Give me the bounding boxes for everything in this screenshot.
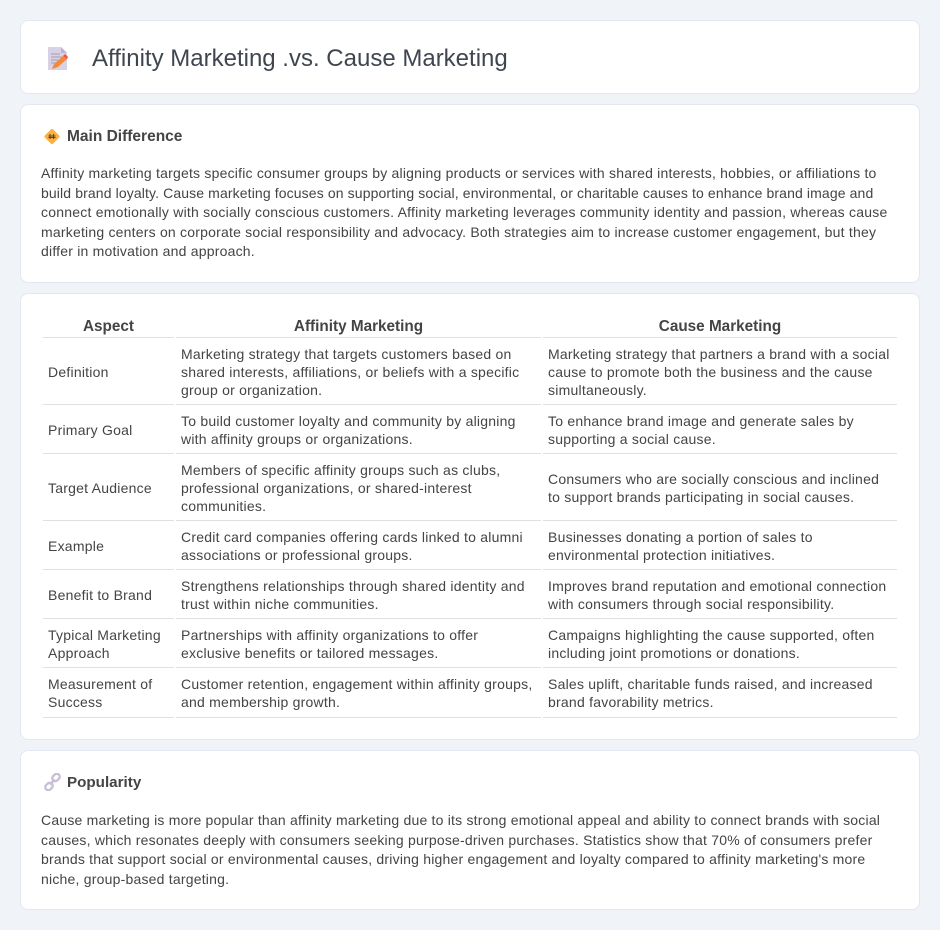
comparison table: professional organizations, or shared-interest bbox=[181, 480, 472, 496]
comparison table: Measurement of bbox=[48, 676, 152, 692]
comparison table: Credit card companies offering cards linked to alumni bbox=[181, 529, 523, 545]
comparison table: shared interests, affiliations, or beliefs with a specific bbox=[181, 364, 519, 380]
comparison table: Consumers who are socially conscious and inclined bbox=[548, 471, 879, 487]
comparison table: Customer retention, engagement within affinity groups, bbox=[181, 676, 532, 692]
comparison table: cause to promote both the business and the cause bbox=[548, 364, 873, 380]
text block: main difference: connect emotionally with socially conscious customers. Affinity marketing leverages community identity and passion, whereas cause bbox=[41, 204, 887, 220]
comparison table: Partnerships with affinity organizations to offer bbox=[181, 627, 478, 643]
icon: chain link bbox=[44, 773, 61, 791]
icon: document with pencil bbox=[48, 47, 68, 70]
text block: popularity bbox=[41, 812, 880, 887]
comparison table: Sales uplift, charitable funds raised, and increased bbox=[548, 676, 873, 692]
text block: popularity: brands that support social or environmental causes, driving higher engagement and loyalty compared to affinity marketing's more bbox=[41, 851, 865, 867]
text block: main difference: differ in motivation and approach. bbox=[41, 243, 255, 259]
comparison table: Typical Marketing bbox=[48, 627, 161, 643]
panel: popularity bbox=[20, 750, 920, 910]
comparison table: supporting a social cause. bbox=[548, 431, 716, 447]
comparison table: Aspect bbox=[83, 318, 134, 335]
comparison table: Success bbox=[48, 694, 103, 710]
title: Affinity Marketing .vs. Cause Marketing bbox=[92, 45, 508, 72]
comparison table: trust within niche communities. bbox=[181, 596, 379, 612]
comparison table: Campaigns highlighting the cause supported, often bbox=[548, 627, 874, 643]
comparison table: Cause Marketing bbox=[659, 318, 781, 335]
text block: popularity: Cause marketing is more popular than affinity marketing due to its strong emotional appeal and ability to connect brands with social bbox=[41, 812, 880, 828]
comparison table: Benefit to Brand bbox=[48, 587, 152, 603]
text block: popularity: niche, group-based targeting. bbox=[41, 871, 229, 887]
comparison table: including joint promotions or donations. bbox=[548, 645, 800, 661]
comparison table: Target Audience bbox=[48, 480, 152, 496]
comparison table: simultaneously. bbox=[548, 382, 647, 398]
comparison table: Marketing strategy that partners a brand with a social bbox=[548, 346, 890, 362]
comparison table: associations or professional groups. bbox=[181, 547, 413, 563]
icon: orange diamond sign bbox=[44, 128, 60, 144]
comparison table: Members of specific affinity groups such as clubs, bbox=[181, 462, 500, 478]
comparison table: with consumers through social responsibility. bbox=[548, 596, 834, 612]
heading: popularity: Popularity bbox=[67, 774, 141, 791]
comparison table: Primary Goal bbox=[48, 422, 132, 438]
comparison table: to support brands participating in social causes. bbox=[548, 489, 854, 505]
text block: main difference bbox=[41, 165, 887, 259]
text block: main difference: Affinity marketing targets specific consumer groups by aligning products or services with shared interests, hobbies, or affiliations to bbox=[41, 165, 877, 181]
comparison table: communities. bbox=[181, 498, 266, 514]
panel: comparison table bbox=[20, 293, 920, 740]
comparison table: environmental protection initiatives. bbox=[548, 547, 775, 563]
panel: main difference bbox=[20, 104, 920, 283]
panel: title card bbox=[20, 20, 920, 94]
comparison table: exclusive benefits or tailored messages. bbox=[181, 645, 438, 661]
text block: popularity: causes, which resonates deeply with consumers seeking purpose-driven purchases. Statistics show that 70% of consumers prefer bbox=[41, 832, 872, 848]
comparison table: Example bbox=[48, 538, 104, 554]
comparison table: Affinity Marketing bbox=[294, 318, 423, 335]
comparison table: group or organization. bbox=[181, 382, 322, 398]
comparison table: To enhance brand image and generate sales by bbox=[548, 413, 854, 429]
text block: main difference: marketing centers on corporate social responsibility and advocacy. Both strategies aim to increase customer engagement, but they bbox=[41, 224, 876, 240]
comparison table: Definition bbox=[48, 364, 109, 380]
comparison table: Approach bbox=[48, 645, 110, 661]
comparison table bbox=[43, 318, 897, 718]
text block: main difference: build brand loyalty. Cause marketing focuses on supporting social, environmental, or charitable causes to enhance brand image and bbox=[41, 185, 873, 201]
comparison table: Improves brand reputation and emotional connection bbox=[548, 578, 886, 594]
comparison table: Strengthens relationships through shared identity and bbox=[181, 578, 525, 594]
comparison table: brand favorability metrics. bbox=[548, 694, 714, 710]
comparison table: and membership growth. bbox=[181, 694, 340, 710]
heading: main difference: Main Difference bbox=[67, 128, 182, 145]
comparison table: with affinity groups or organizations. bbox=[181, 431, 413, 447]
comparison table: Businesses donating a portion of sales to bbox=[548, 529, 813, 545]
comparison table: Marketing strategy that targets customers based on bbox=[181, 346, 512, 362]
comparison table: To build customer loyalty and community by aligning bbox=[181, 413, 516, 429]
